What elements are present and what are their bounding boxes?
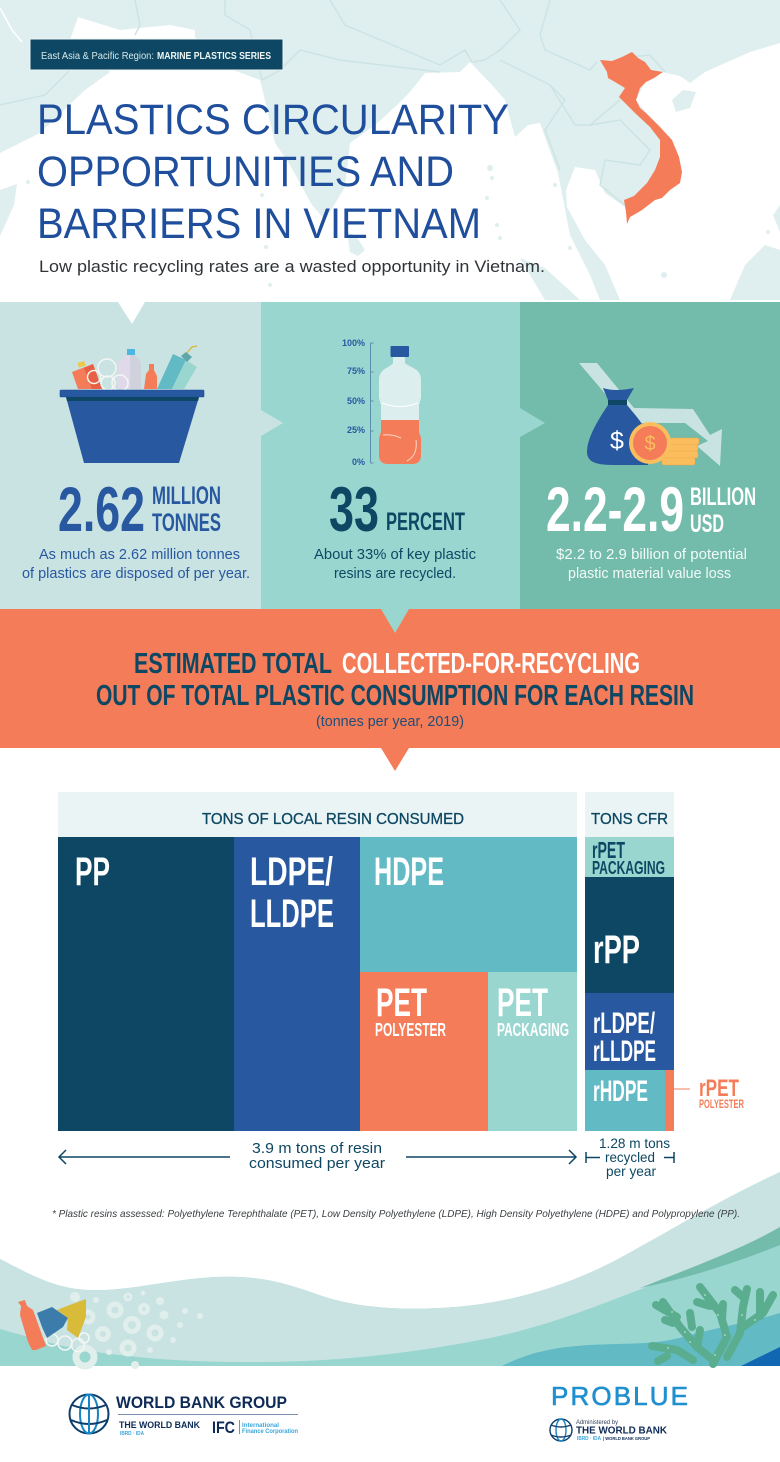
- text: tonnes description: of plastics are disposed of per year.: [22, 565, 250, 582]
- text: value loss description: [556, 546, 747, 582]
- block: rHDPE: [585, 1070, 665, 1131]
- block: PET polyester: PET: [376, 981, 427, 1025]
- logo: World Bank Group: IBRD · IDA: [120, 1431, 144, 1437]
- logo: World Bank Group: [70, 1393, 298, 1437]
- logo: World Bank Group: IFC: [212, 1418, 235, 1437]
- text: value loss description: $2.2 to 2.9 billion of potential: [556, 546, 747, 563]
- chart: treemap of resin consumed: TONS OF LOCAL RESIN CONSUMED: [202, 811, 464, 828]
- subtitle: Low plastic recycling rates are a wasted opportunity in Vietnam.: [39, 257, 545, 276]
- block: rPET packaging: PACKAGING: [592, 858, 665, 878]
- panel: tonnes disposed: [0, 302, 261, 609]
- icon: money bag, coins and falling arrow: [579, 363, 722, 466]
- heading: estimated total collected for recycling: COLLECTED-FOR-RECYCLING: [342, 648, 640, 680]
- background: waves: [0, 1172, 780, 1369]
- stat: 33 percent: PERCENT: [386, 508, 465, 536]
- chart: treemap of resin consumed: [58, 792, 577, 1131]
- icon: bottle gauge at 33 percent: 0%: [352, 457, 365, 467]
- title: BARRIERS IN VIETNAM: [37, 200, 481, 248]
- text: percent description: [314, 546, 476, 582]
- block: LDPE/LLDPE: [234, 837, 360, 1131]
- block: rPET packaging: [585, 837, 674, 878]
- stat: 33 percent: [329, 475, 465, 545]
- icon: globe: [70, 1394, 108, 1434]
- logo: PROBLUE: | WORLD BANK GROUP: [603, 1436, 650, 1441]
- series badge: MARINE PLASTICS SERIES: [157, 51, 271, 62]
- text: units: (tonnes per year, 2019): [316, 713, 464, 730]
- block: rPET polyester: [665, 1070, 744, 1131]
- icon: small globe: [550, 1419, 572, 1441]
- panel: value loss: [520, 302, 780, 609]
- block: PP: PP: [75, 850, 110, 894]
- icon: floating plastic waste: [18, 1299, 89, 1352]
- panel: percent recycled: [261, 302, 520, 609]
- block: PP: [58, 837, 234, 1131]
- icon: bottle gauge at 33 percent: 25%: [347, 425, 365, 435]
- arrow: resin consumed span: [59, 1140, 576, 1172]
- heading: estimated total collected for recycling: ESTIMATED TOTAL: [134, 648, 332, 680]
- text: tonnes description: [22, 546, 250, 582]
- block: PET polyester: [360, 972, 488, 1131]
- chart: treemap of tons collected for recycling: [585, 792, 744, 1131]
- arrow: recycled span: [586, 1135, 674, 1179]
- text: value loss description: plastic material value loss: [568, 565, 731, 582]
- chart: treemap of tons collected for recycling: TONS CFR: [591, 811, 668, 828]
- panel: orange section heading: [0, 609, 780, 771]
- stat: 2.62 million tonnes: 2.62: [58, 475, 145, 545]
- block: rLDPE/rLLDPE: [585, 993, 674, 1070]
- logo: PROBLUE: PROBLUE: [551, 1381, 688, 1411]
- stat: 33 percent: 33: [329, 475, 379, 545]
- logo: World Bank Group: THE WORLD BANK: [119, 1420, 200, 1431]
- block: PET polyester: POLYESTER: [375, 1020, 446, 1040]
- block: rLDPE/rLLDPE: rLDPE/: [593, 1007, 655, 1040]
- arrow: recycled span: 1.28 m tons: [599, 1135, 670, 1151]
- heading: estimated total collected for recycling: [96, 648, 694, 712]
- icon: basket of plastic waste: [60, 346, 204, 463]
- logo: PROBLUE: IBRD · IDA: [577, 1436, 601, 1442]
- block: LDPE/LLDPE: LLDPE: [250, 892, 334, 936]
- block: rPET polyester: rPET: [699, 1075, 739, 1102]
- map highlight: Vietnam: [600, 52, 682, 224]
- stat: 2.62 million tonnes: MILLION: [152, 482, 221, 510]
- text: tonnes description: As much as 2.62 million tonnes: [39, 546, 240, 563]
- block: PET packaging: [488, 972, 577, 1131]
- block: HDPE: [360, 837, 577, 972]
- footnote: * Plastic resins assessed: Polyethylene Terephthalate (PET), Low Density Polyethylene (LDPE), High Density Polyethylene (HDPE) and Polypropylene (PP).: [52, 1208, 740, 1220]
- block: LDPE/LLDPE: LDPE/: [250, 850, 333, 894]
- logo: PROBLUE: Administered by: [576, 1419, 619, 1426]
- icon: bottle gauge at 33 percent: 100%: [342, 338, 365, 348]
- block: PET packaging: PACKAGING: [497, 1020, 569, 1040]
- arrow: recycled span: recycled: [605, 1149, 655, 1165]
- block: HDPE: HDPE: [374, 850, 444, 894]
- block: rPET packaging: rPET: [592, 837, 625, 863]
- arrow: resin consumed span: 3.9 m tons of resin: [252, 1140, 382, 1157]
- icon: bottle gauge at 33 percent: 75%: [347, 366, 365, 376]
- block: rHDPE: rHDPE: [593, 1075, 648, 1108]
- title: OPPORTUNITIES AND: [37, 148, 454, 196]
- arrow: resin consumed span: consumed per year: [249, 1155, 385, 1172]
- block: rPP: [585, 877, 674, 993]
- block: rPP: rPP: [593, 928, 640, 972]
- icon: money bag, coins and falling arrow: $: [644, 433, 656, 455]
- series badge: [30, 39, 283, 70]
- text: percent description: About 33% of key plastic: [314, 546, 476, 563]
- icon: money bag, coins and falling arrow: $: [610, 427, 624, 455]
- title: [37, 96, 509, 248]
- block: rLDPE/rLLDPE: rLLDPE: [593, 1035, 656, 1068]
- stat: 2.2-2.9 billion usd: 2.2-2.9: [546, 475, 684, 545]
- stat: 2.62 million tonnes: TONNES: [152, 509, 221, 537]
- logo: World Bank Group: International: [242, 1423, 279, 1429]
- series badge: East Asia & Pacific Region:: [41, 51, 154, 62]
- logo: World Bank Group: WORLD BANK GROUP: [116, 1393, 287, 1412]
- block: rPET polyester: POLYESTER: [699, 1097, 744, 1111]
- stat: 2.2-2.9 billion usd: USD: [690, 510, 724, 538]
- logo: PROBLUE: [550, 1381, 688, 1442]
- logo: PROBLUE: THE WORLD BANK: [576, 1424, 667, 1436]
- background map of South and Southeast Asia: [0, 0, 780, 300]
- block: PET packaging: PET: [497, 981, 548, 1025]
- icon: coral: [652, 1287, 773, 1364]
- icon: bottle gauge at 33 percent: 50%: [347, 396, 365, 406]
- arrow: recycled span: per year: [606, 1163, 656, 1179]
- title: PLASTICS CIRCULARITY: [37, 96, 509, 144]
- logo: World Bank Group: Finance Corporation: [242, 1429, 298, 1435]
- text: percent description: resins are recycled.: [334, 565, 456, 582]
- icon: bottle gauge at 33 percent: [342, 338, 421, 467]
